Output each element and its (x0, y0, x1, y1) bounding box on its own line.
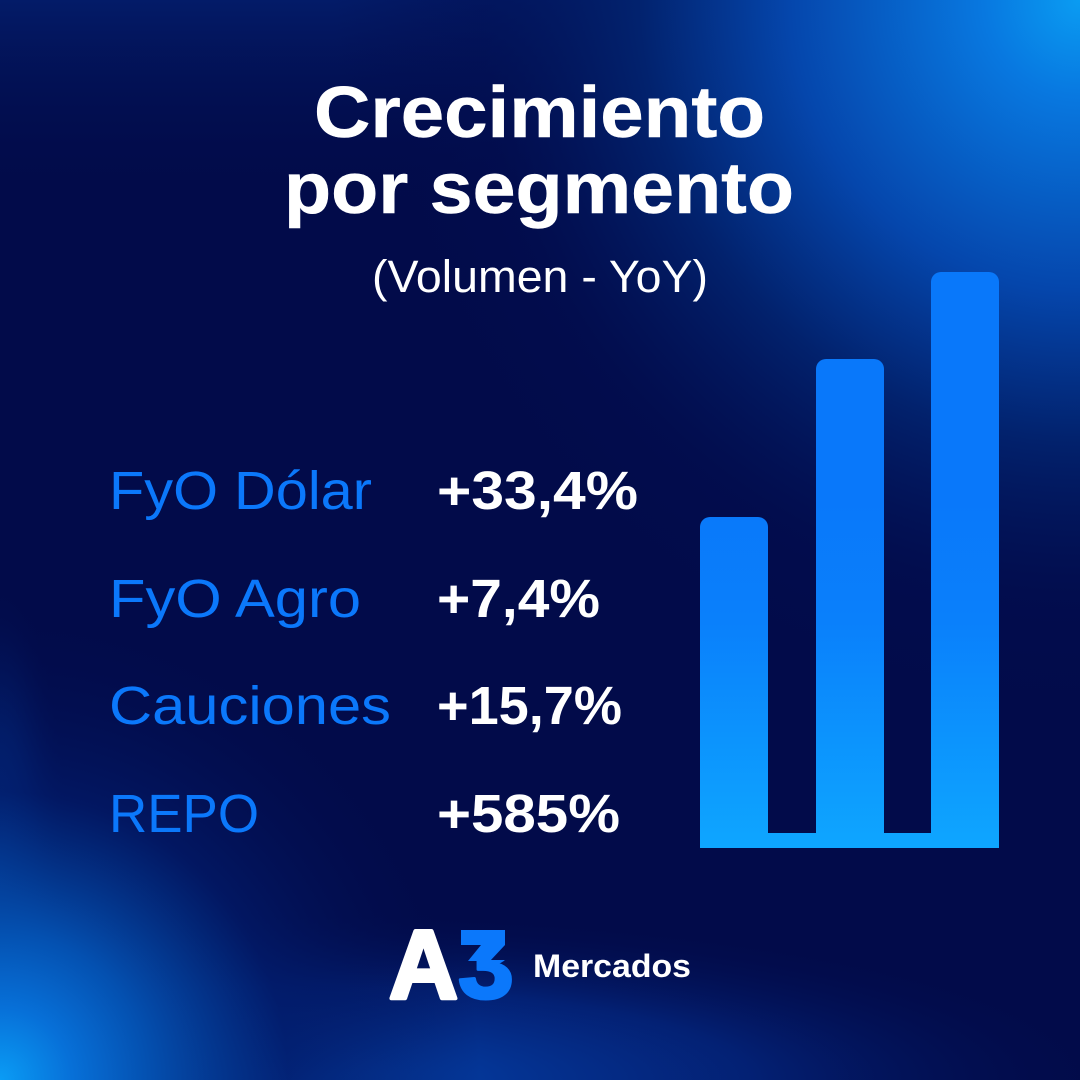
row: REPO: +585% (437, 784, 620, 844)
segment list (109, 461, 638, 844)
title (284, 73, 794, 229)
row: Cauciones: Cauciones (109, 676, 391, 736)
row: FyO Agro: +7,4% (437, 569, 600, 629)
logo: A3 Mercados: A (389, 910, 458, 1019)
row: FyO Dólar: +33,4% (437, 461, 638, 521)
row: FyO Agro: FyO Agro (109, 569, 361, 629)
row: FyO Dólar: FyO Dólar (109, 461, 372, 521)
logo: A3 Mercados: Mercados (533, 948, 691, 984)
title: Crecimiento (314, 73, 765, 153)
row: FyO Agro (109, 569, 600, 629)
row: REPO (109, 784, 620, 844)
subtitle: (Volumen - YoY) (372, 251, 708, 302)
bar chart icon (700, 272, 999, 848)
logo: A3 Mercados (389, 929, 690, 1000)
title: por segmento (284, 149, 794, 229)
row: Cauciones: +15,7% (437, 676, 622, 736)
row: Cauciones (109, 676, 622, 736)
row: FyO Dólar (109, 461, 638, 521)
logo: A3 Mercados: 3 (458, 910, 514, 1019)
row: REPO: REPO (109, 784, 259, 844)
